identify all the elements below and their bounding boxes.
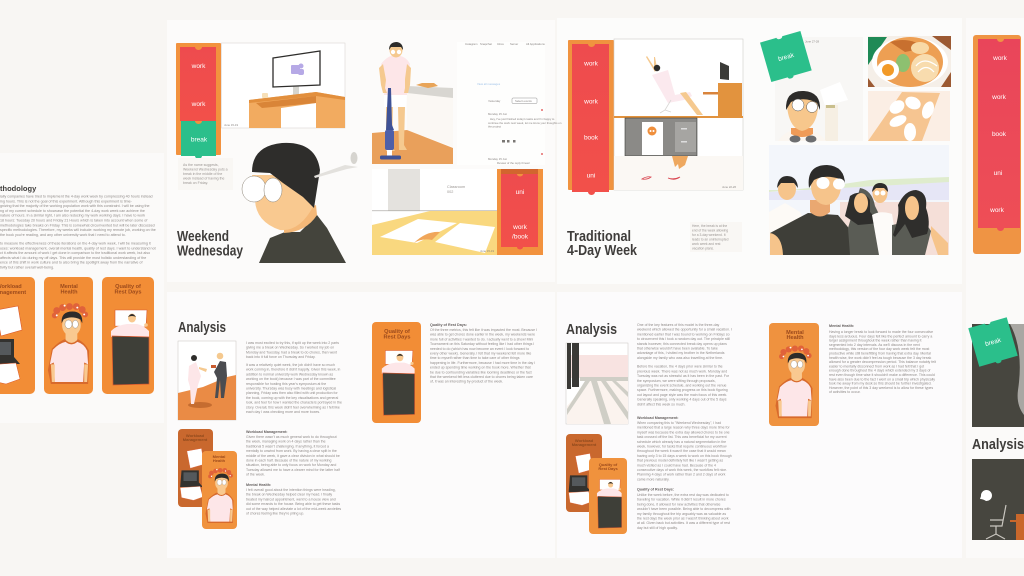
ticket: break rotated: break: [777, 52, 796, 63]
text: traditional analysis: space. Furthermore, making progress on this book figuring: [637, 388, 728, 392]
card: mental health: [769, 323, 819, 426]
page: right edge: [966, 18, 1024, 558]
card: mental health: Mental: [60, 284, 78, 290]
text: traditional analysis: Tuesday was not as stressful as it has been in the past. For: [637, 374, 730, 378]
text: weekend wednesday analysis: giving me a break on Wednesday. So I worked my job on: [246, 346, 334, 350]
stacked cards: workload and rest days: [566, 434, 627, 534]
image: dark room with chair: [972, 459, 1024, 540]
text: quality of rest days: Tournament on this Saturday without feeling like I had other things I: [430, 342, 534, 346]
text: workload management: Tuesday allowed me to have a clearer mind for the latter half: [246, 468, 340, 472]
text: workload management: task crossed off the list. This was beneficial for my current: [637, 435, 727, 439]
text: workload management: situation, being able to only focus on work for Monday and: [246, 463, 336, 467]
text: mental health: took me away from my desk so this should be further investigated.: [829, 382, 932, 386]
text: traditional analysis: previous week. There was not as much work. Monday and: [637, 369, 727, 373]
section: methodology: [0, 184, 156, 394]
caption: traditional: leads to an uninterrupted: [692, 238, 729, 242]
text: workload management: of the week.: [246, 473, 265, 477]
section: analysis traditional: [566, 321, 936, 534]
text: workload management: week, however, for tasks that require continuous workflow: [637, 444, 727, 448]
text: weekend wednesday analysis: university. Thursday was busy with meetings and logistical: [246, 386, 336, 390]
text: traditional analysis: organizing the event schedule, and working out the venue: [637, 384, 727, 388]
scene: desk with monitor: [222, 43, 345, 128]
text: weekend wednesday analysis: planning, Friday was then also filled with unit production for: [246, 391, 338, 395]
text: traditional analysis: that otherwise wouldn't have been available. To take: [637, 346, 718, 350]
text: mental health: the break on Wednesday helped clear my head. I finally: [246, 493, 332, 497]
text: quality of rest days: be due to confounding variables like looming deadlines or the fact: [430, 370, 532, 374]
text: workload management: consecutive days of work this week, the workflow felt nice.: [637, 468, 727, 472]
text: traditional analysis: didn't affect this week so much.: [637, 402, 685, 406]
text: mental health: treated my haircut appointment, went to a house view and: [246, 497, 336, 501]
text: weekend wednesday analysis: back into it full force on Thursday and Friday.: [246, 355, 316, 359]
ticket: work work book uni work: [973, 35, 1021, 254]
ticket: work work book uni: [568, 40, 614, 195]
text: mental health: Mental Health:: [829, 324, 854, 328]
screenshot: email client: continue the work next week, let me know your thoughts on: [488, 121, 562, 125]
screenshot: email client: Monday 15 Jun: [488, 157, 508, 161]
text: traditional analysis: Generally speaking, only working 4 days out of the 5 days: [637, 398, 727, 402]
card: mental health: Health: [786, 335, 804, 341]
text: workload management: mentally to unwind from work. By having a clear spilt in the: [246, 449, 337, 453]
caption: traditional: vacation plans.: [692, 246, 714, 250]
text: quality of rest days: Quality of Rest Days:: [430, 323, 467, 327]
text: weekend wednesday analysis: work coming in, therefore it didn't happily. Given this week, in: [246, 368, 340, 372]
methodology text: 18 hours: Tuesday 20 hours and Friday 21 Hours which is taken into account when some of: [0, 218, 148, 222]
text: mental health: health wise, the work didn't feel as tough because the 3 day break: [829, 356, 931, 360]
text: weekend wednesday analysis: story. Overall, this week didn't feel overwhelming as I felt like: [246, 405, 340, 409]
text: mental health: I felt overall good about the intention things were heading,: [246, 488, 336, 492]
text: workload management: myself was because the extra day allowed chores to be one: [637, 430, 730, 434]
stacked cards: workload and mental: Mental: [213, 454, 225, 459]
methodology text: ng of my current schedule to showcase the potential the 4-day work week can achieve the: [0, 209, 145, 213]
ticket: work work book uni work: work: [992, 55, 1008, 62]
text: mental health: segmented into 2 day intervals. As we'll discuss in the next: [829, 343, 920, 347]
image: group portrait: [769, 145, 949, 255]
scene: stretching at desk: [614, 39, 743, 190]
caption: weekend wednesday: As the name suggests,: [183, 163, 219, 167]
text: mental health: easier to mentally disconnect from work as I had felt that I got: [829, 364, 924, 368]
text: quality of rest days: at all. Given back but activities. It was a different type of rest: [637, 521, 730, 525]
scene: classroom with uni and work book ticket: work: [512, 224, 528, 231]
screenshot: email client: Monday 15 Jun: [488, 112, 508, 116]
text: weekend wednesday analysis: responsible for hosting this year's symposium at the: [246, 382, 326, 386]
ticket: work work break: break: [191, 136, 208, 144]
text: mental health: of activities to occur.: [829, 390, 861, 394]
text: quality of rest days: Quality of Rest Days:: [637, 488, 674, 492]
scene: classroom with uni and work book ticket: /book: [512, 234, 529, 240]
text: traditional analysis: the symposium, we were sifting through proposals,: [637, 379, 716, 383]
card: quality of rest days: Quality of: [115, 284, 141, 290]
text: quality of rest days: ended up spending time working on the book more. Whether that: [430, 366, 531, 370]
text: traditional analysis: stands however, this connected break day opens up plans: [637, 342, 727, 346]
illustration: selfie with glasses: [778, 91, 826, 142]
text: workload management: that previous model definitely felt like I wasn't getting as: [637, 459, 723, 463]
text: quality of rest days: Unlike the week before, the extra rest day was dedicated to: [637, 493, 729, 497]
scene: desk with monitor: June 15-19: [224, 123, 238, 127]
ticket: work work break: work: [191, 63, 206, 70]
section: analysis weekend wednesday: [178, 319, 537, 529]
text: workload management: mentioned that a large reason why three days more time for: [637, 426, 730, 430]
text: quality of rest days: traveling for vacation. While it didn't result in more chores: [637, 498, 726, 502]
text: quality of rest days: day but still of high quality.: [637, 526, 678, 530]
text: mental health: have also been due to the fact I went on a small trip which physically: [829, 377, 935, 381]
screenshot: email client: Snapchat: [480, 42, 492, 46]
image: corridor perspective: [566, 343, 628, 424]
section: right edge page: [968, 317, 1024, 540]
ticket: work work book uni work: work: [991, 94, 1007, 101]
methodology text: the book you're reading, and any other university work that I need to attend to.: [0, 233, 126, 237]
text: weekend wednesday analysis: working on the book) because I was part of the committee: [246, 377, 336, 381]
text: quality of rest days: my family throughout the trip arguably was as valuable as: [637, 512, 726, 516]
text: workload management: much visited as I could have had. Because of the 4: [637, 463, 716, 467]
screenshot: email client: All Applications: [526, 42, 545, 46]
stacked cards: workload and rest days: Management: [572, 442, 597, 447]
methodology text: methodologies take breaks on Friday. This is somewhat circumvented but will be later discussed: [0, 223, 155, 227]
text: quality of rest days: happening in life. Furthermore, because I had more time in the day I: [430, 361, 535, 365]
card: quality of rest days: [372, 322, 421, 423]
text: workload management: Planning 4 days of work rather than 2 and 2 days of work: [637, 473, 726, 477]
scene: classroom with uni and work book ticket: 002: [447, 190, 453, 194]
stacked cards: workload and rest days: Workload: [575, 438, 594, 443]
caption: traditional: [690, 222, 742, 252]
image: ramen: [868, 36, 951, 87]
text: mental health: rest even though time wise it shouldn't make a difference. This could: [829, 373, 935, 377]
text: mental health: Mental Health:: [246, 483, 271, 487]
text: quality of rest days: was able to get chores done earlier in the week, my weekends were: [430, 333, 535, 337]
text: quality of rest days: of, it was an interesting by-product of the week.: [430, 380, 503, 384]
page: methodology: [0, 153, 164, 423]
card: mental health: Mental: [786, 330, 804, 336]
stacked cards: workload and mental: [178, 429, 237, 529]
card: quality of rest days: Quality of: [384, 329, 410, 335]
heading: analysis: Analysis: [566, 321, 617, 338]
text: traditional analysis: to circumvent this I took a random day out. The principle still: [637, 337, 730, 341]
title: weekend wednesday: Wednesday: [177, 242, 244, 260]
caption: weekend wednesday: week instead of having the: [183, 176, 224, 180]
ticket: work work book uni: work: [583, 60, 599, 68]
methodology text: gnizing that the majority of the working population work with this constraint. I will be using the: [0, 204, 150, 208]
screenshot: email client: the project: [488, 124, 501, 128]
text: workload management: throughout the week it wasn't the case that it would mean: [637, 449, 726, 453]
screenshot: email client: Instagram: [465, 42, 478, 46]
title: traditional 4-day week: 4-Day Week: [567, 242, 638, 259]
text: traditional analysis: out layout and page style was the main focus of this week.: [637, 393, 727, 397]
section: weekend wednesday: [176, 42, 562, 263]
card: quality of rest days: [102, 277, 154, 394]
scene: classroom with uni and work book ticket: uni: [516, 189, 524, 196]
methodology text: uses: workload management, overall mental health, quality of rest days. I want to understand not: [0, 246, 156, 250]
text: workload management: came more naturally.: [637, 477, 669, 481]
text: mental health: out of the way helped alleviate a lot of the mid-week anxieties: [246, 507, 341, 511]
caption: weekend wednesday: [178, 158, 233, 190]
text: quality of rest days: time to myself rather than time to take care of other things: [430, 356, 520, 360]
stacked cards: workload and mental: Management: [183, 437, 208, 442]
text: weekend wednesday analysis: Monday and Tuesday, had a break to do chores, then went: [246, 350, 337, 354]
image: dumplings: [868, 91, 950, 141]
text: weekend wednesday analysis: look, and feel for how I wanted the characters portrayed in the: [246, 401, 342, 405]
screenshot: email client: [457, 42, 562, 165]
text: mental health: of chores feeling like they're piling up.: [246, 512, 304, 516]
scene: stretching at desk: June 22-26: [722, 185, 736, 189]
scene: classroom with uni and work book ticket: June 15-19: [480, 249, 494, 253]
card: mental health: [44, 277, 93, 394]
scene background: selfie: June 27-28: [805, 40, 819, 44]
card: quality of rest days: Rest Days: [114, 290, 142, 296]
text: workload management: traditional 5 wasn't challenging. If anything, it forced a: [246, 444, 329, 448]
ticket: break rotated: [760, 31, 812, 84]
text: quality of rest days: every other week). Generally, I felt that my weekend felt more like: [430, 352, 531, 356]
image: conversation with supervisor: [178, 341, 236, 420]
ticket: work work book uni work: book: [992, 131, 1007, 138]
screenshot: email client: Yesterday: [488, 99, 501, 103]
text: traditional analysis: Before the vacation, the 4 days prior were similar to the: [637, 365, 723, 369]
methodology text: ially companies have tried to implement the 4-day work week by compressing 40 hours instead: [0, 194, 153, 198]
caption: traditional: for a 3-day weekend. It: [692, 233, 726, 237]
illustration: person vacuuming: [372, 42, 453, 164]
stacked cards: workload and rest days: Rest Days: [598, 466, 618, 471]
scene background: selfie: [775, 37, 863, 141]
text: traditional analysis: One of the key features of this model is the three-day: [637, 323, 720, 327]
text: workload management: schedule which already has a natural segmentation in the: [637, 440, 726, 444]
card: workload management: [0, 277, 35, 394]
ticket: work work book uni work: uni: [994, 170, 1002, 177]
caption: weekend wednesday: break on Friday.: [183, 181, 208, 185]
caption: weekend wednesday: break in the middle of the: [183, 172, 222, 176]
text: workload management: the week, managing work on 4 days rather than the: [246, 440, 326, 444]
caption: weekend wednesday: Weekend Wednesday puts a: [183, 168, 228, 172]
text: workload management: Workload Management:: [637, 416, 679, 420]
text: quality of rest days: that the weekend felt less cluttered due to chores being taken care: [430, 375, 533, 379]
screenshot: email client: Review of the reply thread: [497, 161, 530, 165]
text: traditional analysis: weekend which allowed the opportunity for a small vacation. I: [637, 328, 732, 332]
screenshot: email client: Select events: [515, 99, 532, 103]
text: workload management: having only 3 to 15 days a week to work on this book through: [637, 454, 732, 458]
methodology text: specific methodologies. Therefore, my weeks will include: working my remote job, working on the: [0, 228, 156, 232]
text: quality of rest days: wouldn't have been possible. Being able to decompress with: [637, 507, 731, 511]
scene: classroom with uni and work book ticket: Classroom: [447, 185, 465, 189]
methodology text: ct it affects the amount of work I get done in comparison to the traditional work week, but also: [0, 251, 150, 255]
text: mental health: enough done throughout the 4 days which extended my 3 days of: [829, 369, 930, 373]
text: workload management: done in each half. Because of the nature of my working: [246, 458, 331, 462]
page: traditional top: [557, 18, 962, 284]
title: weekend wednesday: Weekend: [177, 228, 229, 245]
text: quality of rest days: the rest days the week prior as I wasn't thinking about work: [637, 516, 729, 520]
caption: traditional: end of the week allowing: [692, 228, 728, 232]
screenshot: email client: Server: [510, 42, 518, 46]
text: workload management: middle of the week, it gave a clear division in what should be: [246, 454, 340, 458]
methodology text: ence of this shift in work culture and to also bring the spotlight away from the narrative of: [0, 261, 143, 265]
illustration: person with scissors at head: [242, 143, 358, 263]
ticket: work work book uni: work: [583, 98, 599, 106]
text: workload management: Workload Management:: [246, 430, 288, 434]
caption: traditional: work week and rest: [692, 242, 720, 246]
text: workload management: Given there wasn't as much general work to do throughout: [246, 435, 337, 439]
text: mental health: methodology, this version of the four day work week felt the most: [829, 347, 929, 351]
methodology text: to measure the effectiveness of these iterations on the 4-day work week, I will be measuring it: [0, 242, 151, 246]
image: dark panel with gray shape: [972, 324, 1024, 427]
methodology text: ing hours. This is not the goal of this experiment. Although this experiment is time-: [0, 199, 133, 203]
text: workload management: When comparing this to "Weekend Wednesday", I had: [637, 421, 721, 425]
title: traditional 4-day week: Traditional: [567, 228, 631, 245]
screenshot: email client: Hey, I've just finished today's tasks and I'm happy to: [490, 117, 555, 121]
ticket: work work break: work: [191, 101, 206, 108]
text: mental health: larger assignment throughout the week rather than having it: [829, 339, 921, 343]
text: mental health: did some errands to the house. Being able to get these tasks: [246, 502, 340, 506]
text: mental health: allowed for a greater decompression period. This balance notably felt: [829, 360, 936, 364]
text: mental health: days less arduous. Four days felt like the perfect amount to carry a: [829, 334, 932, 338]
text: weekend wednesday analysis: addition to normal university work Wednesday known as: [246, 372, 333, 376]
stacked cards: workload and mental: Health: [213, 458, 226, 463]
text: weekend wednesday analysis: each day I was checking more and more boxes.: [246, 410, 320, 414]
ticket: break rotated: [968, 317, 1018, 369]
text: quality of rest days: Of the three metrics, this felt like it was impacted the most. Because I: [430, 328, 537, 332]
text: traditional analysis: mentioned earlier that I was bound to working on Fridays so: [637, 332, 730, 336]
text: mental health: Having a longer break to look forward to made the four consecutive: [829, 330, 933, 334]
ticket: work work break: [176, 43, 221, 159]
stacked cards: workload and rest days: Quality of: [599, 462, 618, 467]
methodology text: affects what I do during my off days. This will provide the most holistic understanding of the: [0, 256, 146, 260]
text: weekend wednesday analysis: I was most excited to try this, if split up the week into 2 parts: [246, 341, 339, 345]
page: concept top: [167, 20, 555, 282]
card: mental health: Health: [60, 290, 78, 296]
text: traditional analysis: alongside my family who was also travelling at the time.: [637, 356, 723, 360]
caption: traditional: Here, the break is at the: [692, 224, 727, 228]
text: weekend wednesday analysis: the book, coming up with the key visualisations and general: [246, 396, 338, 400]
stacked cards: workload and mental: Workload: [186, 433, 205, 438]
text: traditional analysis: advantage of this, I visited my brother in the Netherlands: [637, 351, 725, 355]
text: quality of rest days: more full of activities I wanted to do. I actually went to a show! Mini: [430, 337, 533, 341]
methodology text: tivity but rather overall well-being.: [0, 266, 54, 270]
text: mental health: However, the point of this 3 day weekend is to allow for these types: [829, 386, 933, 390]
ticket: work work book uni work: work: [989, 207, 1005, 214]
ticket: break rotated: break: [984, 337, 1003, 348]
ticket: work work book uni: uni: [587, 172, 595, 180]
text: quality of rest days: being done, it allowed for new activities that otherwise: [637, 502, 721, 506]
page: analysis two: [557, 292, 962, 558]
card: quality of rest days: Rest Days: [383, 334, 411, 340]
ticket: work work book uni: book: [584, 134, 599, 142]
scene: classroom with uni and work book ticket: [372, 169, 543, 255]
methodology text: nature of hours. In a similar light, I am also reducing my work working days. I have to work: [0, 214, 145, 218]
heading: methodology: thodology: [0, 184, 37, 193]
section: traditional 4-day week: [567, 31, 1021, 259]
screenshot: email client: Inbox: [497, 42, 504, 46]
text: quality of rest days: needed to do (which has now become an event I look forward to: [430, 347, 529, 351]
text: mental health: productive while still benefitting from having that extra day. Mental: [829, 352, 931, 356]
heading: analysis: Analysis: [178, 319, 226, 336]
page: analysis one: [167, 292, 555, 558]
screenshot: email client: View all messages: [477, 82, 501, 86]
text: weekend wednesday analysis: It was a relatively quiet week, the job didn't have so much: [246, 363, 335, 367]
